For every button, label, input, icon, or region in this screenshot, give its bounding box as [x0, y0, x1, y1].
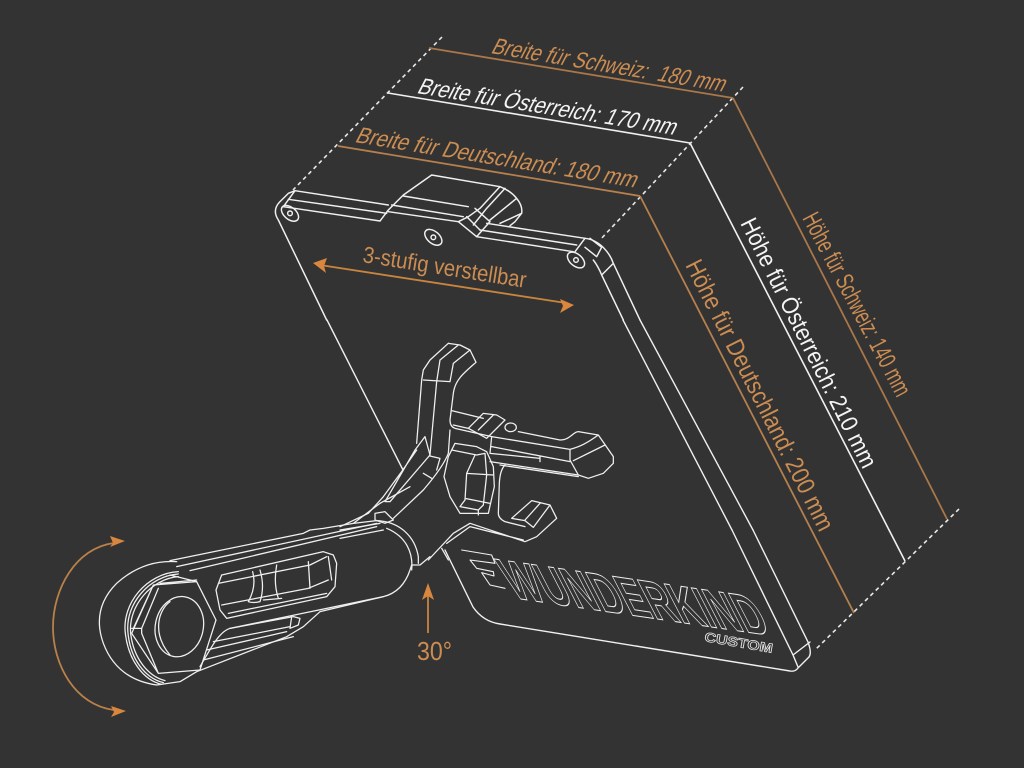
label: 3-stufig verstellbar with arrow — [313, 241, 574, 313]
hex nut — [132, 575, 216, 673]
plate outline and top rail — [275, 175, 640, 320]
tilt handle — [99, 487, 430, 685]
logo wing — [462, 550, 505, 588]
height dimension: Deutschland: Höhe für Deutschland: 200 mm — [680, 255, 839, 536]
height dimension: Österreich — [690, 143, 905, 561]
upper fork arm — [393, 343, 492, 518]
central hexagon cutout — [444, 443, 494, 515]
width dimension: Österreich: Breite für Österreich: 170 mm — [414, 74, 683, 139]
angle arrow and 30° label: 30° — [417, 636, 452, 666]
head and body outline — [99, 557, 430, 685]
width dimension: Schweiz: Breite für Schweiz: 180 mm — [488, 34, 733, 96]
height dimension: Österreich: Höhe für Österreich: 210 mm — [735, 214, 882, 473]
slot — [216, 552, 337, 618]
dashed extension lines — [293, 37, 959, 650]
height dimension: Schweiz: Höhe für Schweiz: 140 mm — [797, 208, 917, 401]
height dimension: Schweiz — [733, 98, 947, 519]
angle arrow and 30° label — [417, 583, 452, 666]
logo: CUSTOM: CUSTOM — [703, 629, 774, 656]
bracket fork — [340, 343, 613, 560]
rotation arrow — [53, 536, 126, 717]
plate side edges — [327, 320, 810, 671]
right arm — [452, 411, 505, 438]
bearing rings — [125, 572, 178, 684]
bore — [150, 592, 209, 661]
width dimension: Schweiz — [429, 34, 733, 98]
mounting screws — [278, 202, 588, 271]
height dimension: Deutschland — [640, 196, 854, 613]
width dimension: Deutschland: Breite für Deutschland: 180 mm — [352, 123, 644, 192]
label: 3-stufig verstellbar with arrow: 3-stufig verstellbar — [361, 241, 529, 293]
lower arm — [428, 465, 557, 560]
logo: WUNDERKIND: WUNDERKIND — [487, 546, 780, 648]
gusset and neck — [340, 437, 430, 538]
